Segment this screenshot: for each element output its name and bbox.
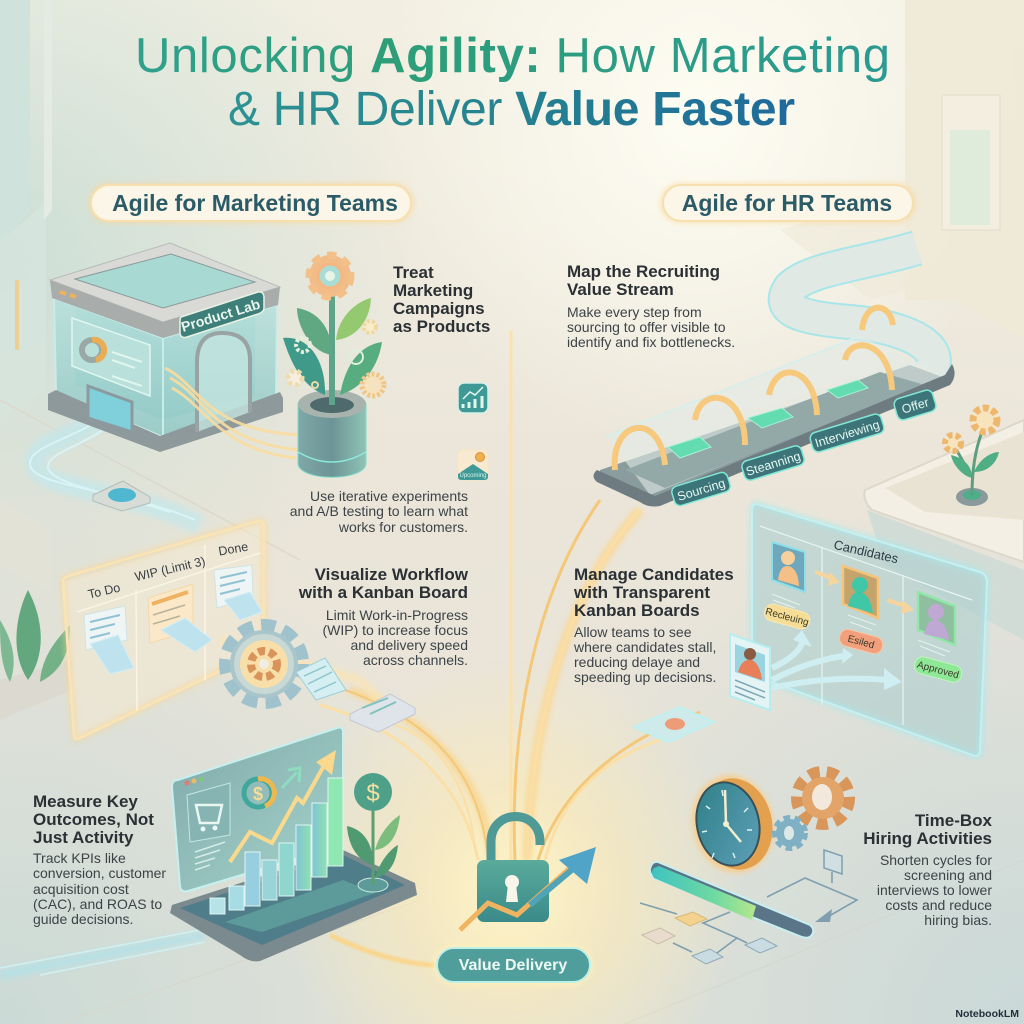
text: visualize workflow: Limit Work-in-Progress bbox=[326, 607, 468, 623]
text: time-box: Time-Box bbox=[915, 811, 993, 830]
illustration: clock and gears bbox=[684, 768, 849, 880]
heading: Agile for Marketing Teams bbox=[88, 183, 414, 223]
heading: Agile for Marketing Teams: Agile for Marketing Teams bbox=[112, 190, 398, 216]
text: manage candidates: speeding up decisions. bbox=[574, 669, 716, 685]
illustration: growing plant bbox=[283, 255, 384, 477]
text: manage candidates: Manage Candidates bbox=[574, 565, 734, 584]
badge: value delivery: Value Delivery bbox=[459, 957, 567, 974]
status pills bbox=[763, 602, 964, 684]
plant on left bbox=[0, 590, 72, 720]
text: measure outcomes: acquisition cost bbox=[33, 881, 129, 897]
text: manage candidates: with Transparent bbox=[573, 583, 710, 602]
text: map recruiting value stream: sourcing to offer visible to bbox=[567, 319, 726, 335]
pipeline labels: Offer bbox=[900, 395, 931, 417]
small tile bbox=[634, 707, 714, 742]
chip bbox=[93, 481, 150, 511]
text: visualize workflow: (WIP) to increase focus bbox=[322, 622, 468, 638]
title bbox=[135, 29, 890, 136]
desk at right bbox=[864, 420, 1024, 640]
documents bbox=[296, 658, 415, 732]
pipeline labels: Sourcing bbox=[676, 476, 727, 504]
kanban headers: WIP (Limit 3) bbox=[133, 554, 207, 584]
status pills: Approved bbox=[916, 660, 960, 681]
illustration: product lab bbox=[30, 243, 300, 525]
heading: Agile for HR Teams bbox=[660, 183, 916, 223]
kanban headers: Done bbox=[217, 540, 249, 559]
kanban headers bbox=[87, 540, 249, 602]
heading: Agile for HR Teams: Agile for HR Teams bbox=[682, 190, 892, 216]
text: map recruiting value stream: Map the Recruiting bbox=[567, 262, 720, 281]
text: measure outcomes: Measure Key bbox=[33, 792, 138, 811]
text: measure outcomes: (CAC), and ROAS to bbox=[33, 896, 162, 912]
text: treat marketing campaigns: Campaigns bbox=[393, 299, 485, 318]
text: treat marketing campaigns: Marketing bbox=[393, 281, 473, 300]
status pills: Recleuing bbox=[764, 606, 810, 629]
text: map recruiting value stream bbox=[567, 262, 735, 350]
text: manage candidates: Kanban Boards bbox=[574, 601, 700, 620]
title: Unlocking Agility: How Marketing bbox=[135, 29, 890, 83]
text: map recruiting value stream: identify and fix bottlenecks. bbox=[567, 334, 735, 350]
notebooklm logo: NotebookLM bbox=[955, 1008, 1019, 1020]
text: time-box: Shorten cycles for bbox=[880, 852, 992, 868]
text: map recruiting value stream: Make every step from bbox=[567, 304, 702, 320]
pipeline labels: Interviewing bbox=[813, 417, 881, 450]
text: visualize workflow: and delivery speed bbox=[350, 637, 468, 653]
icon: upcoming tile: Upcoming bbox=[459, 473, 487, 479]
text: map recruiting value stream: Value Stream bbox=[567, 280, 674, 299]
text: treat marketing campaigns bbox=[393, 263, 490, 336]
illustration: small flower plant bbox=[945, 408, 999, 506]
title: & HR Deliver Value Faster bbox=[228, 83, 795, 136]
text: visualize workflow: Visualize Workflow bbox=[315, 565, 469, 584]
resume card bbox=[730, 634, 770, 710]
status pills: Esiled bbox=[846, 634, 875, 651]
text: measure outcomes: Track KPIs like bbox=[33, 850, 126, 866]
icon: gear bbox=[220, 626, 400, 720]
illustration: recruiting pipeline bbox=[594, 248, 955, 507]
text: time-box: Hiring Activities bbox=[863, 829, 992, 848]
plant with dollar coin bbox=[347, 773, 400, 892]
board title: Candidates bbox=[832, 537, 900, 566]
text: manage candidates: where candidates stall, bbox=[573, 639, 716, 655]
text: manage candidates: Allow teams to see bbox=[574, 624, 692, 640]
text: time-box bbox=[863, 811, 993, 928]
text: measure outcomes: Just Activity bbox=[33, 828, 134, 847]
text: visualize workflow: with a Kanban Board bbox=[298, 583, 468, 602]
candidate cards bbox=[772, 542, 955, 656]
text: time-box: interviews to lower bbox=[877, 882, 992, 898]
text: time-box: costs and reduce bbox=[885, 897, 992, 913]
text: treat marketing campaigns: as Products bbox=[393, 317, 490, 336]
icon: chart tile bbox=[458, 383, 488, 413]
icon: upcoming tile bbox=[458, 450, 488, 480]
illustration: candidates board bbox=[634, 504, 987, 756]
text: iterative experiments bbox=[290, 488, 468, 535]
kanban headers: To Do bbox=[87, 581, 122, 602]
text: measure outcomes: conversion, customer bbox=[33, 865, 166, 881]
text: time-box: screening and bbox=[904, 867, 992, 883]
badge: value delivery bbox=[434, 945, 592, 985]
central light streams bbox=[0, 330, 700, 975]
text: treat marketing campaigns: Treat bbox=[393, 263, 434, 282]
pipeline labels bbox=[670, 389, 937, 507]
illustration: analytics tablet: $ bbox=[253, 784, 263, 804]
text: visualize workflow bbox=[298, 565, 469, 668]
sign: Product Lab: Product Lab bbox=[179, 296, 262, 335]
text: measure outcomes: Outcomes, Not bbox=[33, 810, 154, 829]
illustration: progress bar and flow bbox=[640, 850, 857, 964]
illustration: kanban board bbox=[63, 521, 265, 740]
plant with dollar coin: $ bbox=[366, 780, 380, 807]
pipeline labels: Steanning bbox=[744, 449, 802, 479]
text: measure outcomes bbox=[33, 792, 166, 927]
text: iterative experiments: and A/B testing to learn what bbox=[290, 503, 468, 519]
text: iterative experiments: works for customers. bbox=[338, 519, 468, 535]
text: visualize workflow: across channels. bbox=[363, 652, 468, 668]
text: manage candidates: reducing delaye and bbox=[574, 654, 700, 670]
illustration: analytics tablet bbox=[170, 728, 417, 961]
text: manage candidates bbox=[573, 565, 734, 685]
text: measure outcomes: guide decisions. bbox=[33, 911, 133, 927]
text: time-box: hiring bias. bbox=[924, 912, 992, 928]
text: iterative experiments: Use iterative experiments bbox=[310, 488, 468, 504]
icon: padlock with arrow bbox=[460, 816, 596, 930]
